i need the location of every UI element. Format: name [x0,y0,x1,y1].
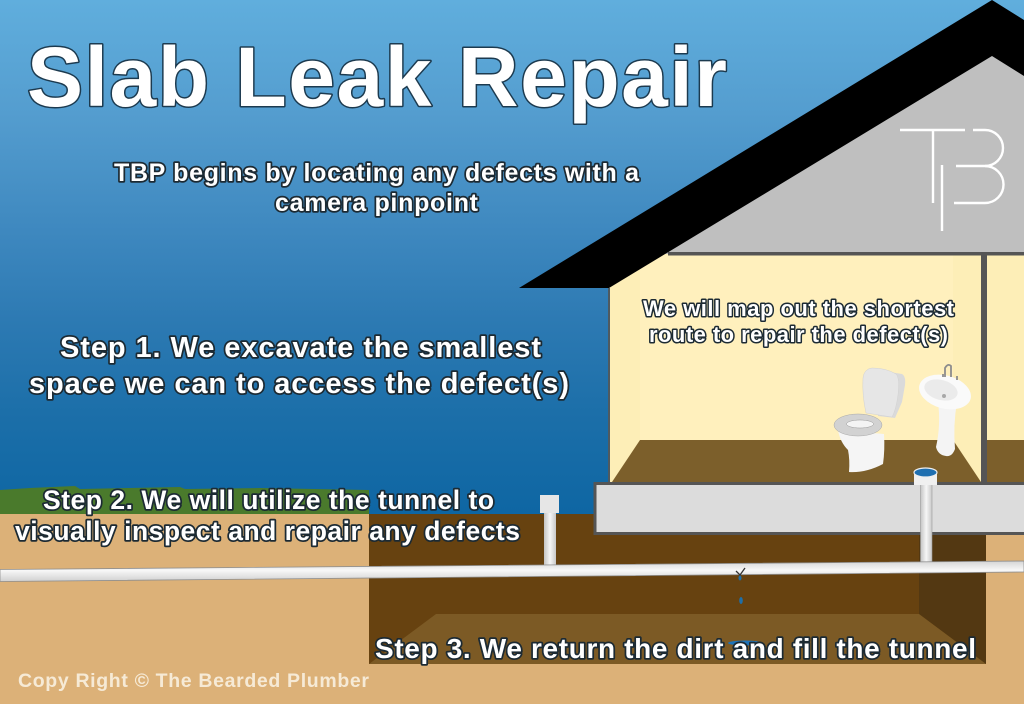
room note [643,296,955,347]
intro text: camera pinpoint [275,189,479,217]
step 1 text: Step 1. We excavate the smallest [60,332,541,364]
room left [609,254,1024,484]
house [519,0,1024,484]
copyright: Copy Right © The Bearded Plumber [18,670,369,692]
room note: route to repair the defect(s) [649,322,948,347]
intro text [114,159,640,217]
title: Slab Leak Repair [27,30,727,124]
logo: TB [900,130,1004,231]
neighbouring room floor [987,440,1024,482]
room back wall [640,255,953,441]
wall divider [981,254,987,484]
room floor [612,440,981,482]
room note: We will map out the shortest [643,296,955,321]
step 3 text: Step 3. We return the dirt and fill the tunnel [375,633,976,664]
slab foundation [595,484,1024,534]
ground [0,514,1024,704]
pipe defect and leak [728,568,762,646]
riser pipe left [540,495,559,566]
icon: toilet [834,368,905,472]
step 1 text [29,332,569,400]
step 1 text: space we can to access the defect(s) [29,368,569,400]
riser pipe right [914,468,937,562]
left wall edge [608,288,610,483]
step 2 text: visually inspect and repair any defects [15,516,520,546]
ceiling beam [668,252,1024,256]
sky background [0,0,1024,515]
step 2 text: Step 2. We will utilize the tunnel to [43,485,494,515]
intro text: TBP begins by locating any defects with a [114,159,640,187]
excavated tunnel [369,514,986,664]
main pipe [0,561,1024,582]
roof [519,0,1024,288]
grass strip [0,486,369,514]
gable [660,40,1024,254]
step 2 text [15,485,520,546]
icon: sink [915,365,975,456]
